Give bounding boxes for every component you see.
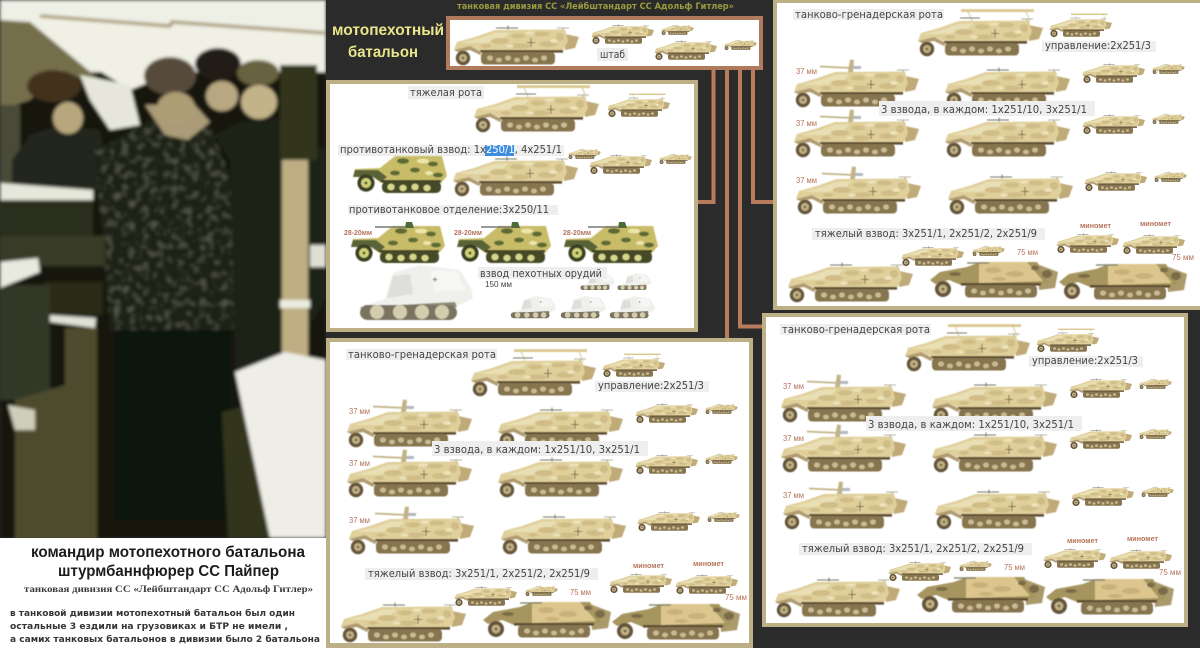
vehicle: 75 mm halftrack — [1046, 579, 1174, 614]
gun calibre label: 28-20мм — [454, 228, 482, 237]
label: management: управление:2x251/3 — [598, 380, 704, 392]
gun calibre label: 75 мм — [570, 587, 591, 597]
label: company title: танково-гренадерская рота — [782, 324, 930, 336]
vehicle: 75 mm halftrack — [917, 577, 1045, 612]
vehicle: command halftrack — [905, 324, 1030, 371]
panel: grenadier company, bottom left — [326, 340, 753, 648]
label: company title: танково-гренадерская рота — [348, 349, 496, 361]
gun calibre label: 37 мм — [349, 406, 370, 416]
vehicle: small white gun — [511, 296, 556, 318]
vehicle: gun halftrack — [783, 482, 908, 529]
vehicle: gun halftrack — [794, 60, 919, 107]
vehicle: large halftrack — [454, 26, 579, 65]
vehicle: white self-propelled gun — [360, 265, 473, 320]
vehicle: halftrack — [1082, 114, 1145, 134]
heading: battalion — [332, 22, 444, 61]
vehicle: halftrack — [1084, 171, 1147, 191]
vehicle: gun halftrack — [781, 424, 906, 472]
vehicle: large halftrack — [341, 602, 466, 642]
vehicle: small command halftrack — [602, 354, 665, 377]
vehicle: halftrack — [1070, 429, 1132, 449]
vehicle: halftrack — [454, 586, 517, 606]
vehicle: gun halftrack — [349, 506, 474, 554]
vehicle: halftrack — [1082, 63, 1145, 83]
vehicle: camouflaged 250/11 — [564, 222, 658, 263]
vehicle: 75 mm halftrack — [930, 262, 1058, 298]
gun calibre label: 37 мм — [796, 66, 817, 76]
vehicle: mortar halftrack — [1122, 234, 1185, 254]
vehicle: halftrack — [501, 514, 626, 554]
gun calibre label: 37 мм — [349, 458, 370, 468]
mortar label: миномет — [633, 561, 664, 570]
vehicle: command halftrack — [918, 9, 1043, 56]
company contents — [775, 324, 1181, 617]
vehicle: 75 mm halftrack — [1059, 264, 1187, 300]
vehicle: halftrack — [636, 403, 698, 423]
vehicle: small halftrack — [525, 586, 558, 596]
vehicle: small command halftrack — [1036, 329, 1099, 352]
vehicle: mortar halftrack — [1044, 548, 1106, 568]
vehicle: small halftrack — [661, 25, 694, 35]
gun calibre label: 37 мм — [349, 515, 370, 525]
label: anti-tank section: противотанковое отделение:3x250/11 — [349, 204, 549, 216]
gun calibre label: 28-20мм — [563, 228, 591, 237]
vehicle: halftrack — [654, 40, 717, 60]
vehicle: small halftrack — [659, 154, 692, 164]
vehicle: halftrack — [932, 432, 1057, 472]
vehicle: small white gun — [618, 274, 651, 290]
caption note line 2: остальные 3 ездили на грузовиках и БТР не имели , — [10, 622, 288, 632]
label: anti-tank platoon: противотанковый взвод: 1x250/1, 4x251/1 — [340, 144, 562, 156]
vehicle: halftrack — [1072, 486, 1134, 506]
vehicle: camouflaged 250 — [353, 156, 447, 193]
label: platoons: 3 взвода, в каждом: 1x251/10, 3x251/1 — [881, 104, 1087, 116]
vehicle: halftrack — [945, 68, 1070, 107]
vehicle: small halftrack — [705, 454, 738, 464]
vehicle: gun halftrack — [347, 450, 472, 497]
mortar label: миномет — [1127, 534, 1158, 543]
header: division name: танковая дивизия СС «Лейбштандарт СС Адольф Гитлер» — [457, 1, 734, 12]
vehicle: halftrack — [590, 154, 652, 174]
gun calibre label: 37 мм — [783, 433, 804, 443]
caption note line 1: в танковой дивизии мотопехотный батальон был один — [10, 608, 295, 619]
vehicle: small halftrack — [568, 149, 601, 159]
vehicle: mortar halftrack — [1110, 549, 1172, 569]
label: heavy company: тяжелая рота — [410, 87, 482, 99]
mortar label: миномет — [1140, 219, 1171, 228]
gun calibre label: 75 мм — [725, 592, 747, 602]
vehicle: small command halftrack — [1050, 14, 1112, 37]
caption division name: танковая дивизия СС «Лейбштандарт СС Адольф Гитлер» — [24, 584, 313, 595]
vehicle: large halftrack — [453, 156, 578, 196]
vehicle: camouflaged 250/11 — [457, 222, 551, 263]
vehicle: gun halftrack — [796, 166, 921, 214]
caption note line 3: а самих танковых батальонов в дивизии было 2 батальона — [10, 634, 320, 645]
label: company title: танково-гренадерская рота — [795, 9, 943, 21]
vehicle: small halftrack — [959, 561, 992, 571]
panel: heavy company — [328, 82, 696, 330]
vehicle: halftrack — [498, 458, 623, 497]
vehicle: 75 mm halftrack — [612, 604, 740, 640]
label: platoons: 3 взвода, в каждом: 1x251/10, 3x251/1 — [434, 444, 640, 456]
vehicle: halftrack — [1070, 378, 1132, 398]
vehicle: camouflaged 250/11 — [351, 222, 445, 263]
gun calibre label: 75 мм — [1004, 562, 1025, 572]
vehicle: small white gun — [610, 296, 655, 318]
gun calibre label: 150 мм — [485, 279, 512, 289]
label: management: управление:2x251/3 — [1045, 40, 1151, 52]
panel: grenadier company, bottom right — [764, 315, 1186, 625]
mortar label: миномет — [1067, 536, 1098, 545]
vehicle: large halftrack — [775, 578, 900, 617]
gun calibre label: 37 мм — [783, 490, 804, 500]
gun calibre label: 37 мм — [796, 175, 817, 185]
mortar label: миномет — [693, 559, 724, 568]
label: heavy platoon: тяжелый взвод: 3x251/1, 2x251/2, 2x251/9 — [815, 228, 1037, 240]
photo: commander and soldiers in trench — [0, 0, 326, 540]
gun calibre label: 75 мм — [1159, 567, 1181, 577]
panel: battalion headquarters — [448, 18, 761, 68]
panel: grenadier company, top right — [775, 1, 1200, 308]
vehicle: mortar halftrack — [1056, 233, 1119, 253]
vehicle: halftrack — [935, 490, 1060, 529]
heading: battalion: батальон — [348, 44, 418, 61]
vehicle: small halftrack — [1152, 114, 1185, 124]
vehicle: small halftrack — [1139, 429, 1172, 439]
vehicle: halftrack — [498, 408, 623, 447]
vehicle: gun halftrack — [347, 400, 472, 447]
vehicle: command halftrack — [474, 85, 599, 132]
vehicle: halftrack — [948, 174, 1073, 214]
vehicle: command halftrack — [471, 349, 596, 396]
vehicle: gun halftrack — [781, 374, 906, 422]
vehicle: halftrack — [945, 118, 1070, 157]
vehicle: small halftrack — [1139, 379, 1172, 389]
label: heavy platoon: тяжелый взвод: 3x251/1, 2x251/2, 2x251/9 — [802, 543, 1024, 555]
vehicle: gun halftrack — [794, 110, 919, 157]
vehicle: small halftrack — [972, 246, 1005, 256]
vehicle: mortar halftrack — [676, 574, 738, 594]
gun calibre label: 75 мм — [1172, 252, 1194, 262]
vehicle: small halftrack — [705, 404, 738, 414]
vehicle: small halftrack — [1152, 64, 1185, 74]
label: HQ: штаб — [600, 49, 625, 61]
caption title line 2: штурмбаннфюрер СС Пайпер — [58, 563, 279, 580]
mortar label: миномет — [1080, 221, 1111, 230]
vehicle: halftrack — [932, 382, 1057, 422]
gun calibre label: 37 мм — [783, 381, 804, 391]
connector lines from HQ to companies — [696, 68, 775, 340]
vehicle: 75 mm halftrack — [483, 602, 611, 638]
vehicle: small halftrack — [1154, 172, 1187, 182]
label: management: управление:2x251/3 — [1032, 355, 1138, 367]
label: heavy platoon: тяжелый взвод: 3x251/1, 2x251/2, 2x251/9 — [368, 568, 590, 580]
label: platoons: 3 взвода, в каждом: 1x251/10, 3x251/1 — [868, 419, 1074, 431]
vehicle: small halftrack — [724, 40, 757, 50]
vehicle: small halftrack — [707, 512, 740, 522]
gun calibre label: 37 мм — [796, 118, 817, 128]
vehicle: mortar halftrack — [610, 573, 672, 593]
vehicle: small command halftrack — [608, 94, 670, 117]
vehicle: small white gun — [561, 296, 606, 318]
heading: battalion: мотопехотный — [332, 22, 444, 39]
vehicle: halftrack — [638, 511, 700, 531]
caption title line 1: командир мотопехотного батальона — [31, 544, 305, 561]
vehicle: halftrack — [636, 454, 698, 474]
vehicle: halftrack — [888, 561, 951, 581]
vehicle: halftrack — [902, 246, 964, 266]
label: infantry gun platoon: взвод пехотных орудий — [480, 268, 602, 280]
vehicle: halftrack — [592, 24, 654, 44]
company contents — [341, 349, 747, 642]
gun calibre label: 75 мм — [1017, 247, 1038, 257]
vehicle: large halftrack — [788, 262, 913, 302]
gun calibre label: 28-20мм — [344, 228, 372, 237]
caption block — [0, 538, 326, 648]
vehicle: small halftrack — [1141, 487, 1174, 497]
vehicle: small white gun — [580, 274, 614, 290]
